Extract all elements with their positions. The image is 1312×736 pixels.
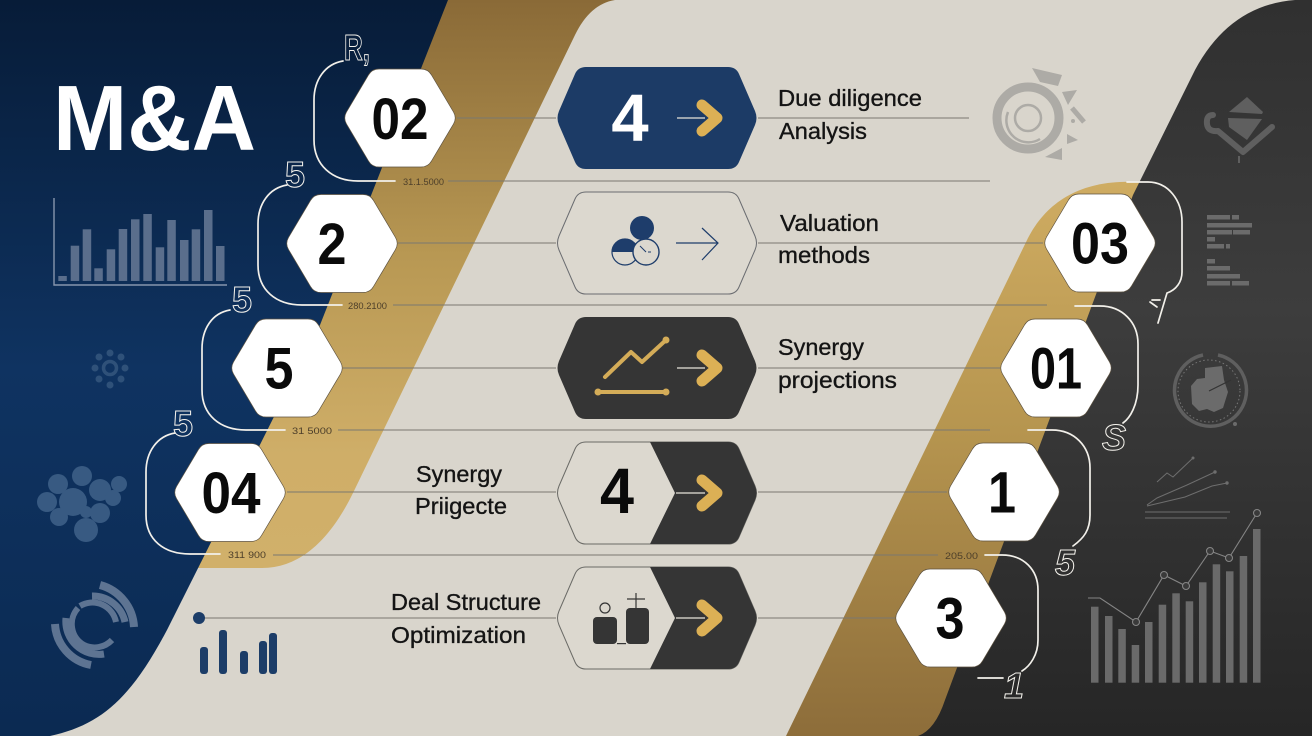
center tile 2: outline: [558, 192, 756, 294]
label: synergy priigecte: Synergy: [416, 461, 502, 487]
left bracket 2 with label: [258, 154, 387, 312]
center tile 1: navy: 4: [611, 81, 649, 156]
chart: thin trend lines: [1145, 457, 1230, 518]
label: valuation methods: [778, 210, 879, 268]
hexagon 2: [287, 194, 397, 292]
right bracket 2 with label: S: [1102, 417, 1126, 458]
icon: blocks: [593, 593, 649, 644]
label: deal structure optimization: Deal Structure: [391, 589, 541, 615]
right bracket 1 with label: [1127, 182, 1182, 323]
icon: growth line: [596, 338, 668, 394]
icon: text lines: [1207, 215, 1252, 286]
right bracket 3 with label: 5: [1055, 542, 1076, 583]
left bracket 3 with label: 31 5000: [292, 426, 332, 437]
right bracket 4 with label: 205.00: [945, 551, 978, 562]
right bracket 2 with label: [1075, 306, 1138, 458]
label: synergy priigecte: Priigecte: [415, 493, 507, 519]
label: synergy projections: [778, 334, 897, 393]
center tile 3: charcoal: [558, 317, 756, 419]
left bracket 4 with label: 311 900: [228, 550, 266, 561]
title: M&A: [53, 66, 256, 170]
hexagon 02: [345, 69, 455, 167]
hexagon 1: [949, 443, 1059, 541]
left bracket 3 with label: [202, 279, 332, 437]
background: left gold band: [190, 0, 615, 568]
icon: small navy bars with dot: [193, 612, 277, 674]
label: due diligence analysis: Due diligence: [778, 85, 922, 111]
label: synergy projections: Synergy: [778, 334, 864, 360]
left bracket 1 with label: 31.1.5000: [403, 177, 444, 188]
background: charcoal panel: [918, 0, 1312, 736]
connector lines: [199, 118, 1047, 618]
hexagon 5: 5: [264, 336, 294, 402]
right bracket 4 with label: [945, 551, 1038, 706]
label: valuation methods: Valuation: [780, 210, 879, 236]
hexagon 03: 03: [1071, 212, 1129, 276]
hexagon 01: 01: [1030, 336, 1082, 402]
hexagon 04: [175, 444, 285, 542]
hexagon 3: 3: [936, 586, 964, 652]
icon: gear seal: [997, 68, 1084, 160]
icon: concentric rings: [55, 585, 134, 665]
background: navy panel: [0, 0, 448, 736]
hexagon 1: 1: [988, 460, 1016, 526]
left bracket 2 with label: 280.2100: [348, 301, 387, 312]
label: valuation methods: methods: [778, 242, 870, 268]
label: due diligence analysis: [778, 85, 922, 144]
center tile 1: navy: [558, 67, 756, 169]
left bracket 4 with label: 5: [173, 403, 193, 444]
icon: radial node: [92, 350, 128, 388]
left bracket 3 with label: 5: [232, 279, 252, 320]
icon: gauge: [1175, 355, 1246, 426]
left bracket 4 with label: [146, 403, 266, 561]
background: right gold band: [786, 181, 1150, 736]
right bracket 4 with label: 1: [1004, 665, 1024, 706]
hexagon 01: [1001, 319, 1111, 417]
hexagon 5: [232, 319, 342, 417]
label: deal structure optimization: Optimization: [391, 622, 526, 648]
left bracket 2 with label: 5: [285, 154, 305, 195]
hexagon 04: 04: [202, 461, 260, 526]
left bracket 1 with label: [314, 27, 444, 188]
left bracket 1 with label: R,: [344, 27, 370, 68]
icon: circle cluster: [37, 466, 127, 542]
bar chart: navy panel: [54, 198, 227, 285]
label: synergy priigecte: [415, 461, 507, 519]
hexagon 2: 2: [318, 212, 346, 277]
icon: overlapping circles: [612, 216, 659, 265]
label: synergy projections: projections: [778, 367, 897, 393]
center tile 4: split: [558, 442, 756, 544]
label: deal structure optimization: [391, 589, 541, 648]
hexagon 02: 02: [372, 87, 428, 152]
hexagon 3: [896, 569, 1006, 667]
center tile 4: split: 4: [600, 455, 634, 527]
center tile 5: split with icon: [558, 567, 756, 669]
chart: bars with line: [1088, 510, 1260, 683]
right bracket 3 with label: [1028, 430, 1090, 583]
hexagon 03: [1045, 194, 1155, 292]
label: due diligence analysis: Analysis: [779, 118, 867, 144]
icon: kettle: [1207, 97, 1272, 163]
